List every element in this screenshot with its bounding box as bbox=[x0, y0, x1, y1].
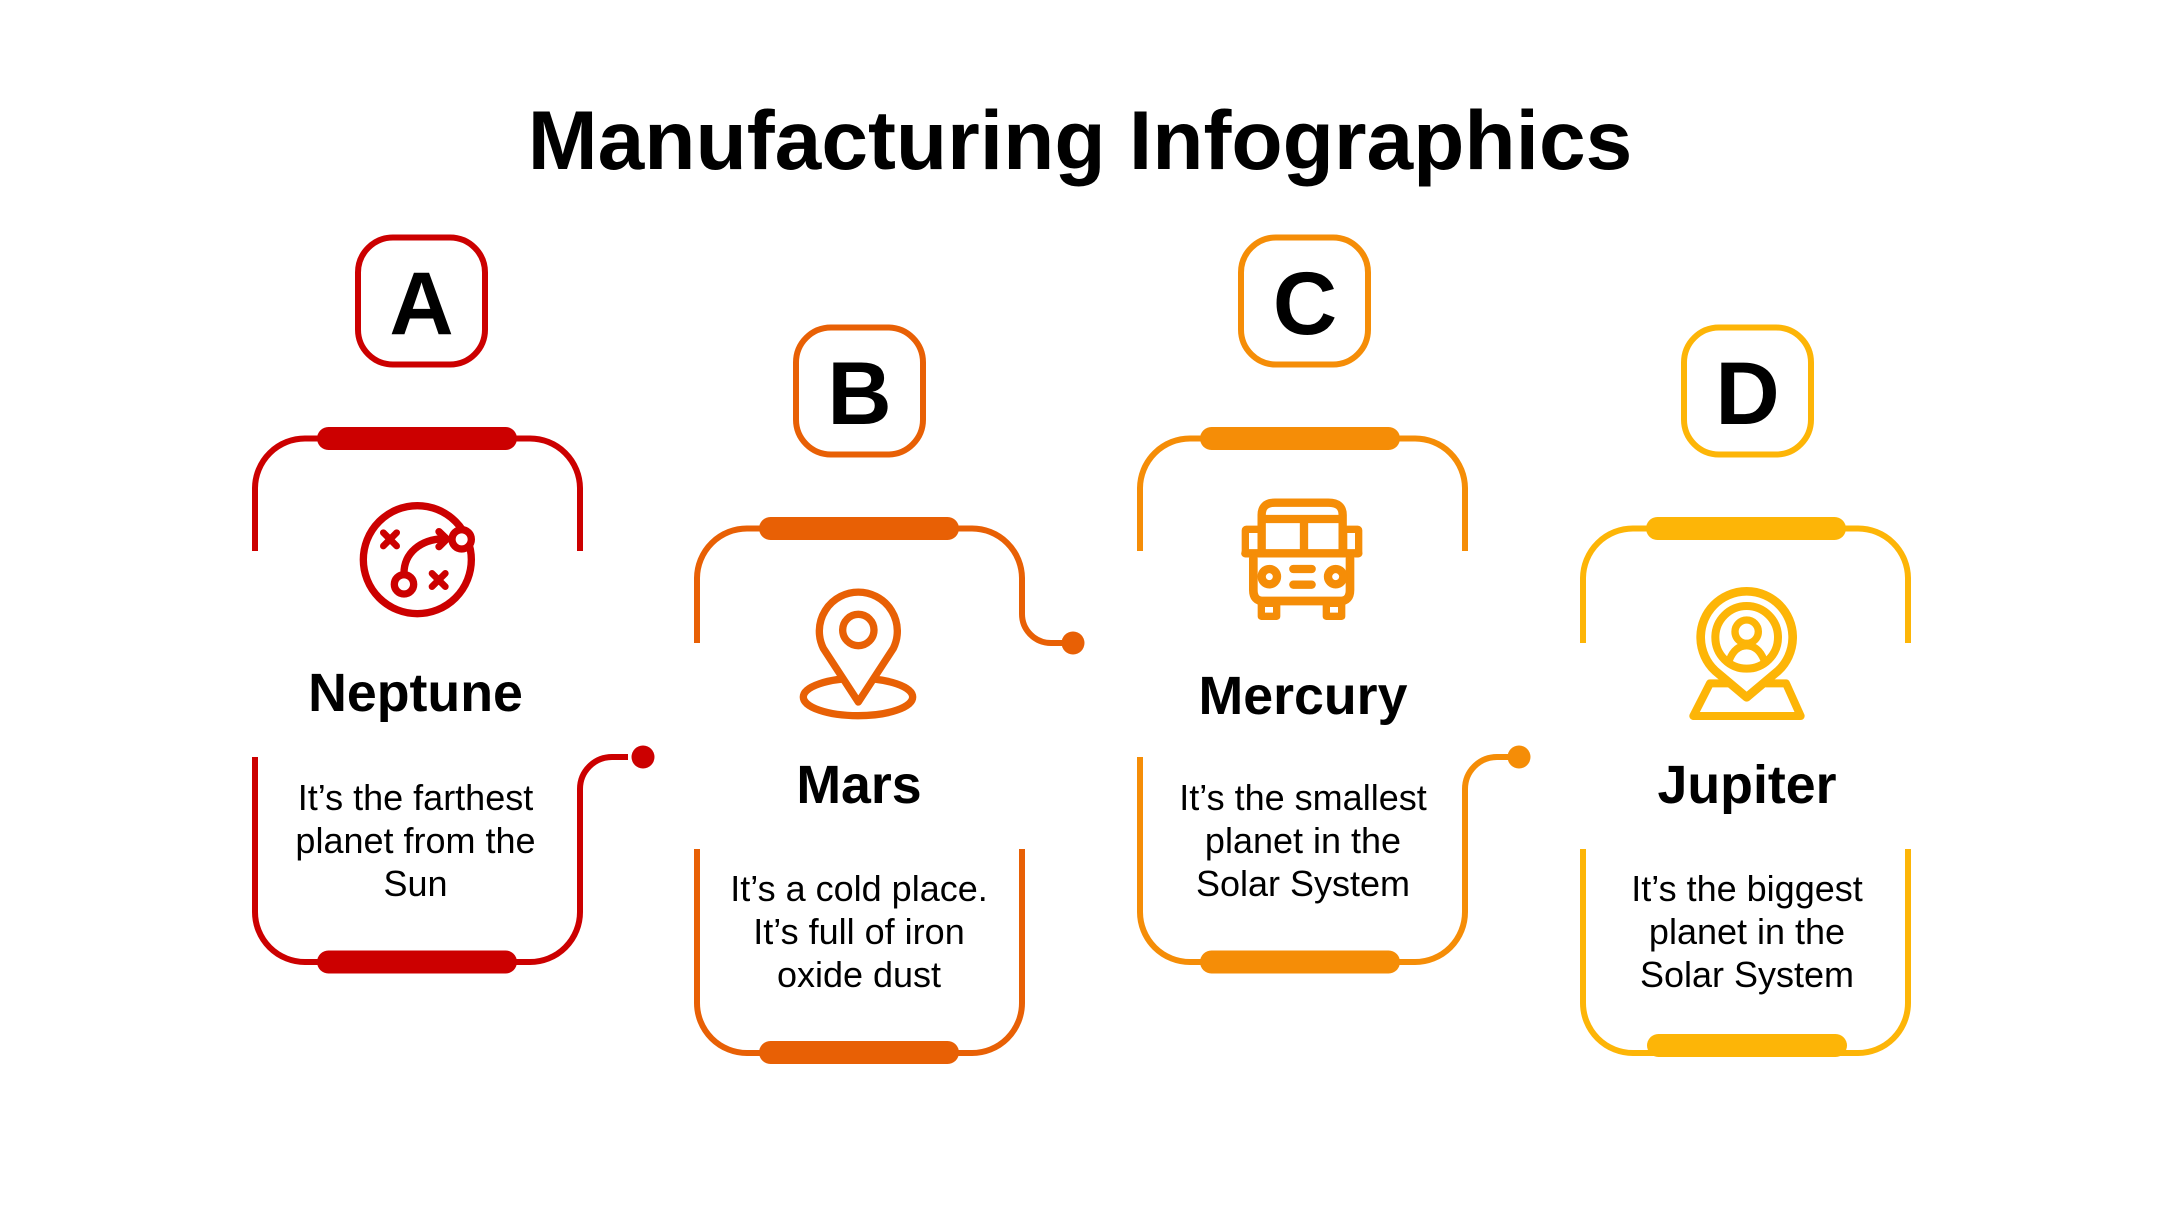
badge: D bbox=[1684, 328, 1811, 454]
heading: Neptune: Neptune bbox=[308, 663, 523, 723]
description: Jupiter: It’s the biggest bbox=[1631, 868, 1863, 909]
badge: A: A bbox=[389, 253, 454, 353]
description: Mars: It’s a cold place. bbox=[730, 868, 988, 909]
frame bottom with connector bbox=[255, 746, 654, 974]
description: Neptune: Sun bbox=[383, 863, 448, 904]
heading: Mercury: Mercury bbox=[1199, 666, 1408, 726]
description: Jupiter: planet in the bbox=[1649, 911, 1845, 952]
description: Neptune: It’s the farthest bbox=[298, 777, 533, 818]
panel: D Jupiter bbox=[1583, 328, 1908, 1057]
description: Neptune: planet from the bbox=[295, 820, 536, 861]
badge: C: C bbox=[1273, 253, 1337, 353]
description: Mars: It’s full of iron bbox=[753, 911, 965, 952]
frame top bbox=[1583, 517, 1908, 643]
description: Mercury: It’s the smallest bbox=[1179, 777, 1427, 818]
panel: C Mercury bbox=[1140, 238, 1530, 974]
frame top with connector bbox=[697, 517, 1084, 654]
description: Mercury: Solar System bbox=[1196, 863, 1410, 904]
badge: D: D bbox=[1715, 343, 1780, 443]
frame bottom with connector bbox=[1140, 746, 1530, 974]
icon: map pin with person bbox=[1693, 591, 1801, 716]
frame top bbox=[255, 427, 580, 551]
description: Jupiter: Solar System bbox=[1640, 954, 1854, 995]
badge: B bbox=[796, 328, 923, 454]
icon: location pin bbox=[803, 592, 913, 716]
panel: A Neptune bbox=[255, 238, 654, 974]
panel: B Mars bbox=[697, 328, 1084, 1064]
description: Mars: oxide dust bbox=[777, 954, 941, 995]
badge: B: B bbox=[827, 343, 892, 443]
badge: A bbox=[358, 238, 485, 364]
description: Mercury: planet in the bbox=[1205, 820, 1401, 861]
heading: Jupiter: Jupiter bbox=[1658, 755, 1837, 815]
heading: Mars: Mars bbox=[796, 755, 922, 815]
frame bottom bbox=[697, 849, 1022, 1064]
icon: strategy play bbox=[363, 506, 471, 614]
badge: C bbox=[1241, 238, 1368, 364]
title: Manufacturing Infographics bbox=[528, 93, 1632, 187]
frame bottom bbox=[1583, 849, 1908, 1057]
frame top bbox=[1140, 427, 1465, 551]
icon: bus bbox=[1245, 503, 1359, 616]
